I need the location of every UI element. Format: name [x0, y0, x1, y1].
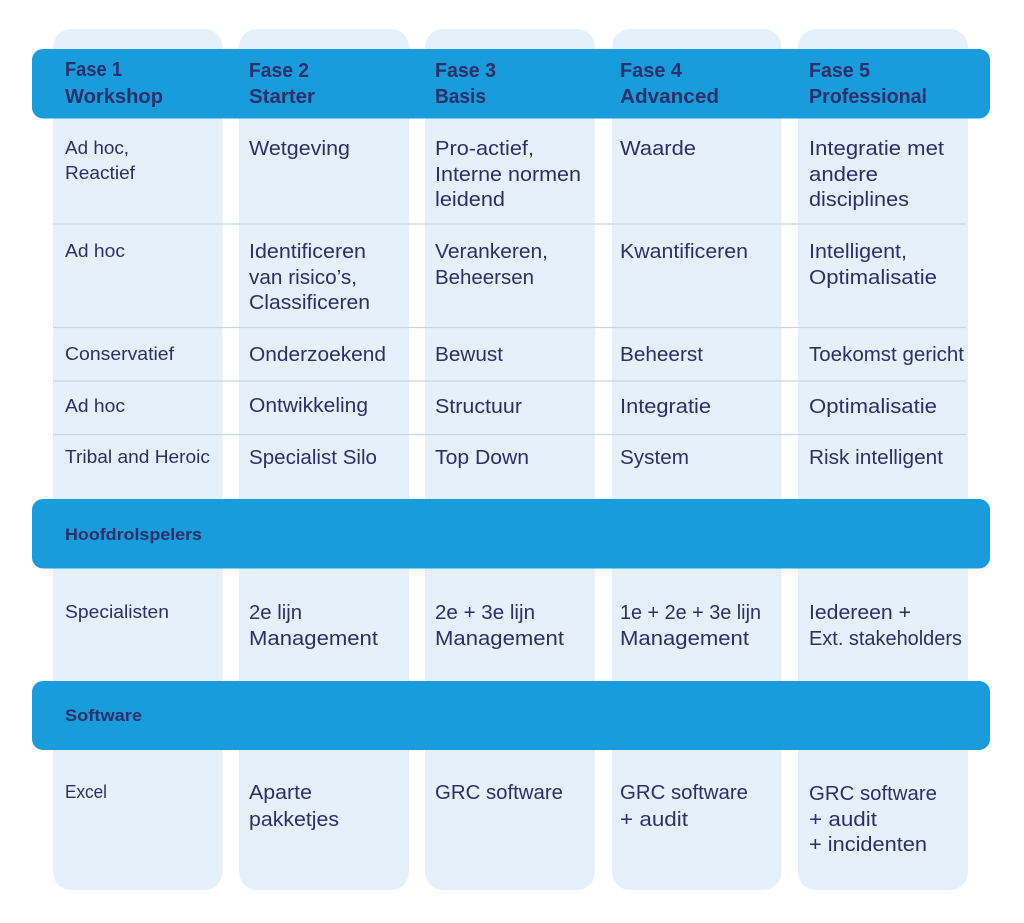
table row 2: Ad hoc	[65, 241, 125, 261]
heading: fase 4	[620, 60, 719, 108]
section bar: Hoofdrolspelers	[32, 499, 990, 568]
table row: software: pakketjes	[249, 809, 339, 831]
table row 5: Tribal and Heroic	[65, 447, 210, 467]
table row 2	[65, 241, 937, 314]
table row 1: Integratie met	[809, 138, 944, 160]
heading: fase 3: Fase 3	[435, 60, 496, 82]
table row 3: Conservatief	[65, 344, 175, 364]
heading: fase 2	[249, 60, 315, 108]
table row: software: + incidenten	[809, 834, 927, 856]
section bar: Software	[32, 681, 990, 750]
table row 3: Toekomst gericht	[809, 344, 964, 366]
heading: fase 4: Fase 4	[620, 60, 683, 82]
heading: fase 5	[809, 60, 927, 108]
table row: hoofdrolspelers: Management	[620, 628, 749, 650]
table row: software: GRC software	[620, 782, 748, 804]
heading: fase 5: Fase 5	[809, 60, 870, 82]
table row 4: Ontwikkeling	[249, 395, 368, 417]
heading: fase 4: Advanced	[620, 86, 719, 108]
table row 1: Pro-actief,	[435, 138, 534, 160]
table row: hoofdrolspelers: Iedereen +	[809, 602, 911, 624]
table row: hoofdrolspelers: Management	[249, 628, 378, 650]
table row 3: Bewust	[435, 344, 503, 366]
table row 1: leidend	[435, 189, 505, 211]
table row: software: Aparte	[249, 782, 312, 804]
table row 1: andere	[809, 164, 878, 186]
table row 2: Intelligent,	[809, 241, 907, 263]
table row 1: Wetgeving	[249, 138, 350, 160]
table row: software	[65, 782, 937, 856]
table row 1	[65, 138, 944, 211]
table row: hoofdrolspelers: 2e lijn	[249, 602, 302, 624]
table row: hoofdrolspelers: Management	[435, 628, 564, 650]
table row 2: Classificeren	[249, 292, 370, 314]
table row: software: Excel	[65, 782, 107, 802]
table row 3: Onderzoekend	[249, 344, 386, 366]
table row 1: disciplines	[809, 189, 909, 211]
table row 1: Waarde	[620, 138, 696, 160]
table row 4: Integratie	[620, 396, 711, 418]
table row: hoofdrolspelers: 2e + 3e lijn	[435, 602, 535, 624]
table row 3: Beheerst	[620, 344, 703, 366]
table row: hoofdrolspelers: 1e + 2e + 3e lijn	[620, 602, 761, 624]
table row 4: Optimalisatie	[809, 396, 937, 418]
table row 4: Structuur	[435, 396, 522, 418]
table row 2: Kwantificeren	[620, 241, 748, 263]
table row 1: Interne normen	[435, 164, 581, 186]
heading: fase 1: Workshop	[65, 86, 163, 108]
table row 2: Identificeren	[249, 241, 366, 263]
table row: software: + audit	[620, 809, 688, 831]
section bar: Software: Software	[65, 706, 142, 725]
table row: software: + audit	[809, 809, 877, 831]
table row 4	[65, 395, 937, 418]
table row 5: Specialist Silo	[249, 447, 377, 469]
table row 2: Verankeren,	[435, 241, 548, 263]
table row: software: GRC software	[809, 783, 937, 805]
table row 2: Beheersen	[435, 267, 534, 289]
table row 1: Ad hoc,	[65, 138, 129, 158]
table row 5: Risk intelligent	[809, 447, 943, 469]
table row 5	[65, 447, 943, 469]
header bar: phases	[32, 49, 990, 118]
table row: hoofdrolspelers	[65, 602, 962, 650]
heading: fase 1: Fase 1	[65, 59, 122, 81]
section bar: Hoofdrolspelers: Hoofdrolspelers	[65, 525, 202, 544]
table row: software: GRC software	[435, 782, 563, 804]
table row 4: Ad hoc	[65, 396, 125, 416]
heading: fase 2: Starter	[249, 86, 315, 108]
table row 1: Reactief	[65, 163, 136, 183]
table row 5: System	[620, 447, 689, 469]
table row: hoofdrolspelers: Ext. stakeholders	[809, 628, 962, 650]
table row 2: Optimalisatie	[809, 267, 937, 289]
table row 2: van risico’s,	[249, 267, 357, 289]
table row: hoofdrolspelers: Specialisten	[65, 602, 169, 622]
heading: fase 1	[65, 59, 163, 108]
heading: fase 2: Fase 2	[249, 60, 309, 82]
heading: fase 5: Professional	[809, 86, 927, 108]
heading: fase 3	[435, 60, 496, 108]
table row 5: Top Down	[435, 447, 529, 469]
heading: fase 3: Basis	[435, 86, 486, 108]
table row 3	[65, 344, 964, 366]
